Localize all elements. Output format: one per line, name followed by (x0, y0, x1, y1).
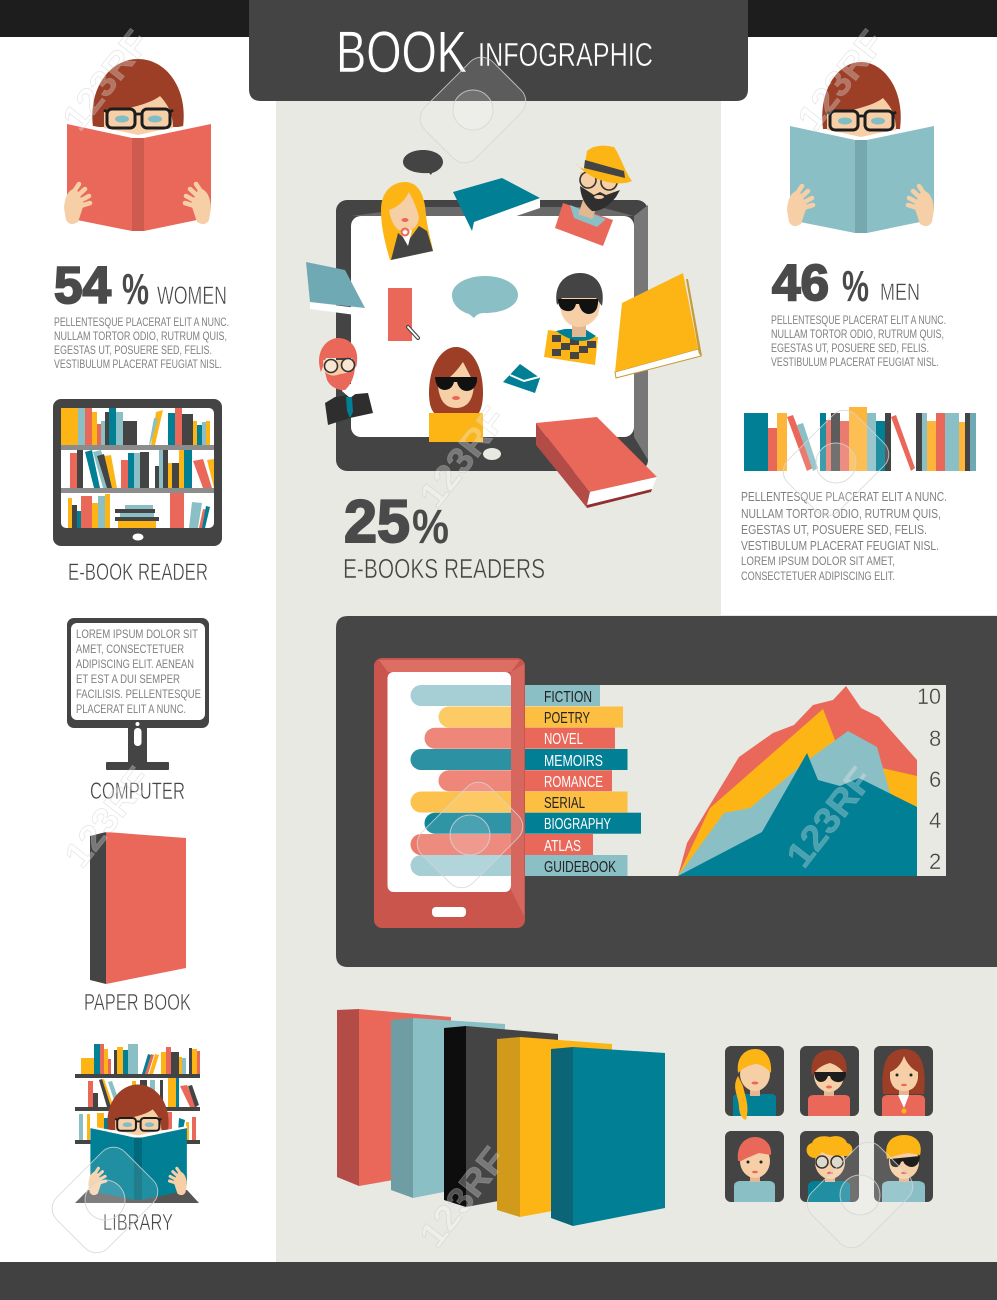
watermark badge: bookshelf (777, 404, 895, 522)
statistic: 54 percent women: 54 (54, 257, 111, 315)
label: e-book reader: E-BOOK READER (68, 559, 208, 586)
watermark: tablet: 123RF (411, 399, 514, 515)
bar: atlas: ATLAS (544, 838, 581, 855)
bar: serial (410, 792, 628, 812)
panel: e-book reader (53, 399, 222, 586)
statistic: 25 percent: % (412, 501, 449, 554)
statistic: 25 percent: 25 (344, 488, 410, 555)
avatars grid (725, 1046, 933, 1202)
text block: description: CONSECTETUER ADIPISCING ELIT. (741, 571, 895, 583)
label: library: LIBRARY (103, 1209, 173, 1235)
monitor text (76, 629, 201, 716)
text block: men (771, 315, 946, 369)
panel: dark chart panel (336, 616, 997, 967)
avatar: red blazer woman (874, 1046, 933, 1116)
statistic: 46 percent men: 46 (772, 254, 829, 311)
text block: women: NULLAM TORTOR ODIO, RUTRUM QUIS, (54, 331, 227, 343)
icon: tablet with bookshelves (53, 399, 222, 546)
chart axis numbers: 8 (929, 726, 941, 751)
envelope (503, 364, 540, 393)
monitor text: PLACERAT ELIT A NUNC. (76, 704, 186, 716)
bar: romance (438, 770, 612, 791)
watermark badge: phone (411, 776, 529, 894)
panel: computer (67, 618, 209, 805)
statistic: 25 percent (344, 488, 449, 555)
stacked book bars (410, 685, 641, 876)
statistic: 54 percent women (54, 257, 227, 315)
icon: paper book (90, 832, 186, 984)
icon: person reading teal book (88, 1085, 187, 1200)
book: dark (444, 1026, 558, 1207)
speech bubble: dark (403, 150, 443, 175)
person: man with red beard (319, 338, 373, 425)
avatar: yellow curly hair with glasses (800, 1131, 859, 1202)
bar: poetry: POETRY (544, 710, 590, 727)
bar: serial: SERIAL (544, 795, 585, 812)
avatar: pink short hair (725, 1131, 784, 1202)
text block: men: VESTIBULUM PLACERAT FEUGIAT NISL. (771, 357, 939, 369)
bar: novel: NOVEL (544, 731, 583, 748)
title banner (249, 0, 748, 101)
icon: tablet (336, 200, 648, 471)
text block: women: VESTIBULUM PLACERAT FEUGIAT NISL. (54, 359, 222, 371)
statistic: 46 percent men: MEN (880, 279, 920, 306)
panel: row of books and description (741, 407, 976, 583)
book: yellow (615, 273, 702, 378)
bar: memoirs (410, 749, 628, 770)
bar: fiction: FICTION (544, 689, 592, 706)
chart axis numbers: 4 (929, 808, 941, 833)
person: man with hat (555, 146, 632, 246)
text block: description (741, 489, 947, 583)
text block: description: PELLENTESQUE PLACERAT ELIT A NUNC. (741, 489, 947, 504)
title: INFOGRAPHIC: INFOGRAPHIC (478, 36, 653, 73)
chart axis numbers: 10 (917, 684, 941, 709)
book: red (536, 417, 657, 508)
large book row (337, 1009, 665, 1226)
avatar: sunglasses brunette (800, 1046, 859, 1116)
icon: bookshelves (75, 1044, 200, 1144)
text block: women: PELLENTESQUE PLACERAT ELIT A NUNC. (54, 317, 229, 329)
statistic: 54 percent women: % (122, 265, 149, 314)
avatar: blonde with ponytail (725, 1046, 784, 1120)
bar: guidebook: GUIDEBOOK (544, 859, 616, 876)
bar: biography (425, 813, 641, 834)
icon: monitor (67, 618, 209, 770)
avatar: yellow hair with sunglasses (874, 1131, 933, 1202)
icon: woman reading red book (64, 59, 211, 231)
watermark: bottom centre: 123RF (411, 1139, 514, 1255)
chart axis numbers: 6 (929, 767, 941, 792)
table (75, 1190, 199, 1203)
monitor text: AMET, CONSECTETUER (76, 644, 184, 656)
note with paperclip (388, 288, 418, 341)
book: teal (551, 1047, 665, 1226)
monitor text: ADIPISCING ELIT. AENEAN (76, 659, 194, 671)
phone (374, 658, 525, 928)
watermark: top right: 123RF (789, 22, 892, 138)
book: light blue (391, 1018, 505, 1198)
bar: memoirs: MEMOIRS (544, 753, 603, 770)
panel: paper book (84, 832, 191, 1015)
bar: atlas (410, 834, 593, 855)
text block: description: VESTIBULUM PLACERAT FEUGIAT NISL. (741, 538, 939, 553)
person: man with sunglasses (544, 273, 603, 365)
panel: library (75, 1044, 200, 1235)
text block: description: LOREM IPSUM DOLOR SIT AMET, (741, 556, 895, 568)
text block: women: EGESTAS UT, POSUERE SED, FELIS. (54, 345, 212, 357)
watermark badge: library (46, 1141, 164, 1259)
title: BOOK: BOOK (336, 20, 467, 85)
icon: row of books (744, 407, 976, 471)
watermark: chart: 123RF (778, 759, 881, 875)
statistic: 46 percent men (772, 254, 920, 311)
chart background (525, 685, 946, 876)
text block: description: EGESTAS UT, POSUERE SED, FELIS. (741, 522, 927, 537)
book: light blue (306, 262, 365, 316)
top bar (0, 0, 997, 37)
monitor text: FACILISIS. PELLENTESQUE (76, 689, 201, 701)
book: yellow (497, 1037, 612, 1217)
speech bubble: light blue (452, 276, 518, 318)
chart axis numbers (917, 684, 941, 874)
bottom bar (0, 1262, 997, 1300)
icon: man reading blue book (787, 62, 934, 233)
text block: description: NULLAM TORTOR ODIO, RUTRUM QUIS, (741, 506, 941, 521)
statistic: 54 percent women: WOMEN (157, 282, 227, 310)
panel: e-books readers illustration (306, 146, 702, 584)
label: paper book: PAPER BOOK (84, 989, 191, 1015)
text block: men: PELLENTESQUE PLACERAT ELIT A NUNC. (771, 315, 946, 327)
bar: novel (425, 728, 615, 749)
bar: romance: ROMANCE (544, 774, 603, 791)
text block: men: EGESTAS UT, POSUERE SED, FELIS. (771, 343, 929, 355)
bar: biography: BIOGRAPHY (544, 816, 611, 833)
watermark badge: avatars (801, 1136, 919, 1254)
monitor text: ET EST A DUI SEMPER (76, 674, 180, 686)
watermark: top left: 123RF (54, 22, 157, 138)
person: blonde woman (381, 182, 433, 260)
book: teal (453, 178, 540, 231)
label: e-books readers: E-BOOKS READERS (343, 553, 545, 584)
bar: guidebook (410, 855, 628, 876)
panel: women readers (54, 59, 229, 371)
chart axis numbers: 2 (929, 849, 941, 874)
panel: men readers (771, 62, 946, 369)
text block: women (54, 317, 229, 371)
area chart (678, 686, 917, 876)
watermark badge: header (414, 51, 532, 169)
bar: fiction (410, 685, 600, 706)
bar: poetry (438, 706, 623, 728)
watermark: left middle: 123RF (56, 759, 159, 875)
person: woman with red hair (429, 347, 483, 442)
text block: men: NULLAM TORTOR ODIO, RUTRUM QUIS, (771, 329, 944, 341)
label: computer: COMPUTER (90, 778, 185, 805)
page background: centre panel (276, 37, 997, 1262)
monitor text: LOREM IPSUM DOLOR SIT (76, 629, 198, 641)
statistic: 46 percent men: % (842, 262, 869, 311)
book: red (337, 1009, 451, 1186)
